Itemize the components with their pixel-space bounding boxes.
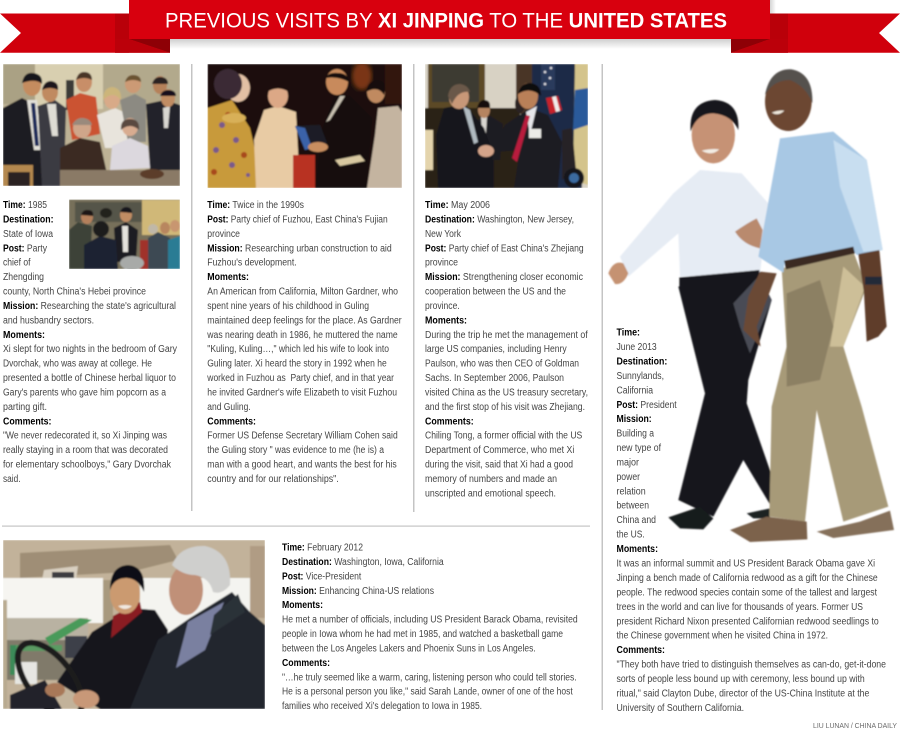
text block: 1985 visit: Time: 1985 [3, 200, 47, 211]
text block: June 2013 visit: between [616, 501, 649, 512]
photo: 1985 Iowa group portrait [3, 64, 180, 186]
text block: June 2013 visit: the US. [616, 530, 645, 541]
text block: 1990s visits: was nearing death in 1986, he muttered the name [206, 330, 398, 341]
title: PREVIOUS VISITS BY XI JINPING TO THE UNITED STATES [165, 10, 727, 32]
text block: 1990s visits: "Kuling, Kuling…," which led his wife to look into [207, 344, 389, 355]
text block: 1985 visit: really staying in a room that was decorated [3, 445, 168, 456]
text block: February 2012 visit: He is a personal person you like," said Sarah Lande, owner of one of the host [282, 687, 573, 698]
text block: May 2006 visit: memory of numbers and made an [425, 474, 557, 485]
text block: 1985 visit: and husbandry sectors. [3, 315, 94, 326]
photo: 2012 tractor cab with two men [3, 540, 265, 709]
text block: 1985 visit: State of Iowa [3, 229, 53, 240]
text block: May 2006 visit: During the trip he met the management of [425, 330, 588, 341]
text block: May 2006 visit: Paulson, who was then CEO of Goldman [425, 359, 579, 370]
text block: February 2012 visit: Time: February 2012 [282, 542, 363, 554]
text block: June 2013 visit: relation [616, 486, 646, 497]
text block: June 2013 visit: Building a [616, 429, 654, 440]
Obama [769, 252, 888, 522]
text block: February 2012 visit: Mission: Enhancing China-US relations [282, 586, 434, 597]
text block: 1985 visit: presented a bottle of Chinese herbal liquor to [3, 373, 176, 384]
text block: February 2012 visit: Post: Vice-President [282, 571, 361, 582]
right ribbon tail [731, 14, 900, 53]
text block: June 2013 visit: China and [616, 515, 656, 526]
photo: 2013 Xi and Obama walking cutout [608, 69, 894, 542]
text block: May 2006 visit: during the visit, said that Xi had a good [425, 460, 573, 470]
Xi [678, 273, 773, 517]
text block: 1990s visits: An American from California, Milton Gardner, who [207, 286, 398, 298]
text block: 1985 visit: Xi slept for two nights in the bedroom of Gary [3, 344, 177, 355]
text block: February 2012 visit: Comments: [282, 658, 330, 669]
text block: February 2012 visit: Destination: Washington, Iowa, California [282, 557, 444, 568]
text block: June 2013 visit: the Chinese government when he visited China in 1972. [616, 631, 828, 642]
text block: February 2012 visit [282, 542, 578, 712]
text block: May 2006 visit: Time: May 2006 [425, 200, 490, 211]
text block: February 2012 visit: people in Iowa whom he had met in 1985, and watched a basketball game [282, 629, 563, 640]
text block: 1990s visits: and Guling. [207, 402, 251, 413]
text block: February 2012 visit: between the Los Angeles Lakers and Phoenix Suns in Los Angeles. [282, 643, 536, 654]
text block: 1985 visit: Comments: [3, 416, 52, 427]
text block: June 2013 visit: ritual," said Clayton Dube, director of the US-China Institute at the [616, 688, 870, 699]
text block: 1985 visit: Dvorchak, who was away at college. He [3, 359, 152, 370]
text block: 1985 visit [3, 200, 177, 485]
text block: 1990s visits: country and for our relationships". [207, 474, 339, 485]
text block: May 2006 visit: province. [425, 301, 460, 312]
text block: May 2006 visit: Comments: [425, 416, 474, 427]
text block: February 2012 visit: He met a number of officials, including US President Barack Obama, revisited [282, 615, 578, 626]
text block: 1985 visit: chief of [3, 258, 31, 269]
text block: May 2006 visit: Chiling Tong, a former official with the US [425, 431, 583, 442]
text block: May 2006 visit: Department of Commerce, who met Xi [425, 445, 574, 456]
text block: 1985 visit: Destination: [3, 214, 54, 225]
text block: June 2013 visit: Destination: [616, 356, 667, 368]
text block: June 2013 visit: Comments: [616, 645, 665, 656]
text block: 1985 visit: county, North China's Hebei province [3, 286, 146, 298]
text block: May 2006 visit: Destination: Washington, New Jersey, [425, 214, 574, 225]
text block: 1990s visits: Mission: Researching urban construction to aid [207, 243, 392, 254]
text block: May 2006 visit: Mission: Strengthening closer economic [425, 272, 583, 283]
text block: 1985 visit: Gary's parents who gave him popcorn as a [3, 387, 166, 398]
text block: 1990s visits: worked in Fuzhou as Party chief, and in that year [206, 373, 395, 384]
text block: 1990s visits: the Guling story " was evidence to me (he is) a [207, 445, 384, 456]
text block: February 2012 visit: "…he truly seemed like a warm, caring, listening person who could tell stories. [282, 672, 577, 683]
text block: May 2006 visit [425, 200, 588, 499]
text block: 1990s visits: Guling later. Xi heard the story in 1992 when he [207, 359, 387, 370]
text block: June 2013 visit: Sunnylands, [616, 371, 664, 382]
text block: June 2013 visit: new type of [616, 443, 661, 454]
text block: June 2013 visit: major [616, 458, 640, 468]
photo: 1985 inset reception scene [69, 200, 180, 270]
text block: 1990s visits: Former US Defense Secretary William Cohen said [207, 431, 398, 442]
text block: 1990s visits: he invited Gardner's wife Elizabeth to visit Fuzhou [207, 387, 397, 398]
text block: 1985 visit: Moments: [3, 330, 45, 341]
text block: 1990s visits: Fuzhou's development. [207, 258, 297, 269]
text block: 1985 visit: Post: Party [3, 243, 47, 254]
text block: 1990s visits [206, 200, 402, 485]
text block: June 2013 visit: power [616, 472, 641, 483]
text block: 1990s visits: spent nine years of his childhood in Guling [207, 301, 369, 312]
text block: June 2013 visit: University of Southern California. [616, 703, 744, 714]
text block: May 2006 visit: visited China as the US treasury secretary, [425, 387, 588, 398]
text block: June 2013 visit: sorts of people less bound up with ceremony, less bound up with [616, 674, 865, 685]
photo: 2006 handshake with flags [425, 64, 588, 188]
text block: 1990s visits: man with a good heart, and wants the best for his [207, 460, 397, 470]
text block: February 2012 visit: families who received Xi's delegation to Iowa in 1985. [282, 701, 482, 712]
text block: June 2013 visit: Moments: [616, 544, 658, 555]
text block: 1990s visits: Post: Party chief of Fuzhou, East China's Fujian [207, 214, 388, 225]
text block: June 2013 visit: Time: [616, 328, 640, 339]
text block: 1990s visits: maintained deep feelings for the place. As Gardner [207, 315, 402, 326]
text block: 1990s visits: Comments: [207, 416, 256, 427]
text block: May 2006 visit: large US companies, including Henry [425, 344, 567, 355]
text block: May 2006 visit: Sachs. In September 2006, Paulson [425, 373, 564, 384]
text block: 1990s visits: province [207, 229, 240, 240]
text block: 1985 visit: "We never redecorated it, so Xi Jinping was [3, 431, 167, 442]
text block: May 2006 visit: Post: Party chief of East China's Zhejiang [425, 243, 584, 254]
text block: June 2013 visit: June 2013 [616, 342, 657, 353]
text block: June 2013 visit: California [616, 385, 653, 396]
text block: May 2006 visit: New York [425, 229, 462, 240]
text block: May 2006 visit: unscripted and emotional speech. [425, 488, 556, 499]
text block: May 2006 visit: Moments: [425, 315, 467, 326]
divider strokes [2, 64, 603, 710]
text block: 1985 visit: Zhengding [3, 272, 44, 283]
text block: 1990s visits: Time: Twice in the 1990s [207, 200, 304, 211]
photo: 1990s Fuzhou gift presentation [208, 62, 402, 188]
text block: May 2006 visit: province [425, 258, 458, 269]
text block: February 2012 visit: Moments: [282, 600, 323, 611]
text block: June 2013 visit: trees in the world and can live for thousands of years. Former US [616, 602, 863, 613]
text block: June 2013 visit [616, 328, 886, 714]
text block: June 2013 visit: Mission: [616, 414, 652, 425]
text block: 1985 visit: parting gift. [3, 402, 47, 413]
left ribbon tail [0, 14, 170, 53]
text block: 1985 visit: for elementary schoolboys," Gary Dvorchak [3, 460, 172, 470]
text block: May 2006 visit: cooperation between the US and the [425, 286, 566, 298]
text block: 1985 visit: said. [3, 474, 20, 485]
text block: 1985 visit: Mission: Researching the state's agricultural [3, 301, 176, 312]
title banner [0, 0, 900, 53]
text block: 1990s visits: Moments: [207, 272, 249, 283]
text block: May 2006 visit: and the first stop of his visit was Zhejiang. [425, 402, 585, 413]
text block: June 2013 visit: Post: President [616, 400, 677, 411]
